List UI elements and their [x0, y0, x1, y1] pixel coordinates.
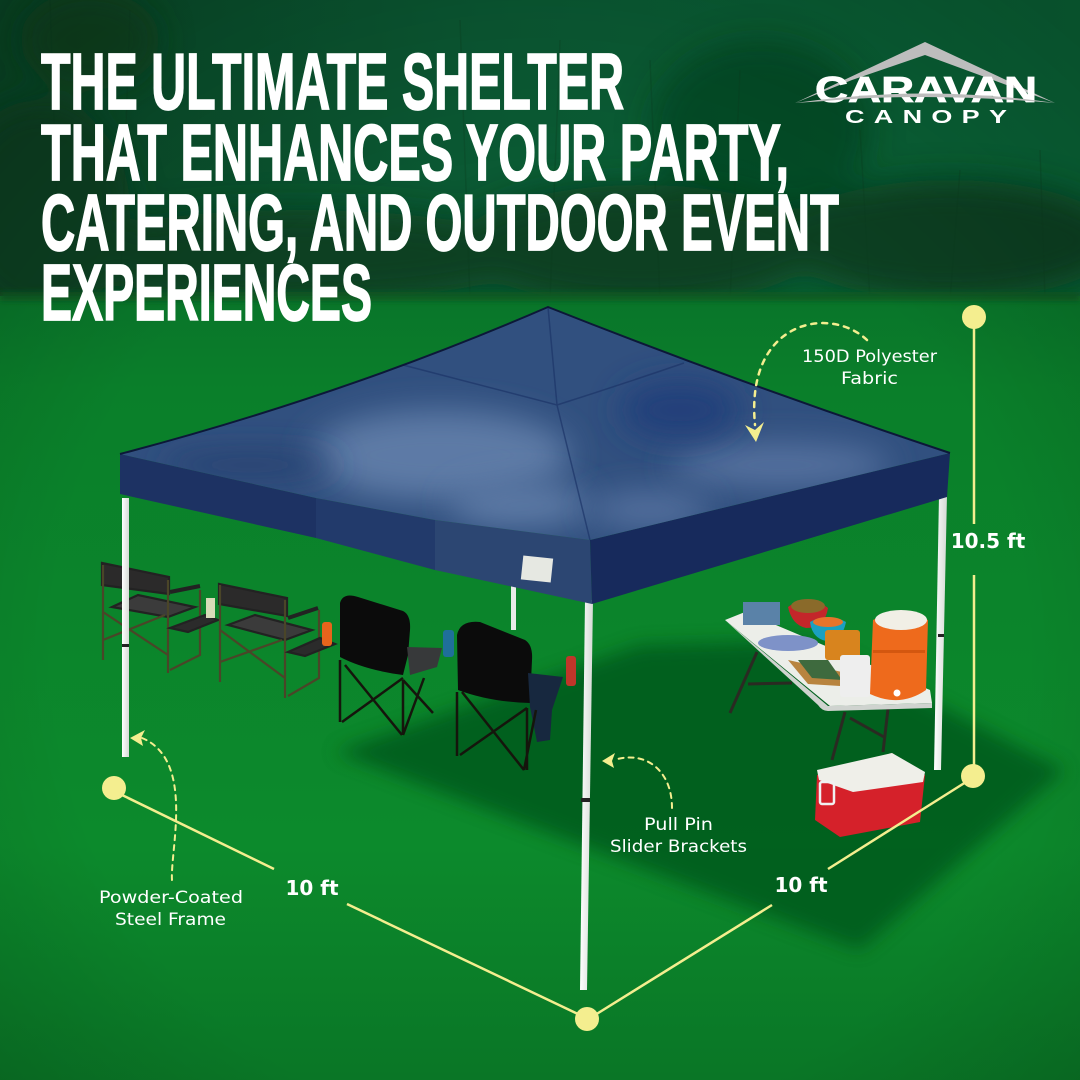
- callout: Powder-Coated Steel Frame: [99, 730, 243, 929]
- orange water cooler: [870, 610, 928, 700]
- canopy shadow on grass: [335, 640, 1065, 950]
- background: forest and sky: [0, 0, 1080, 320]
- dimension: right width 10 ft: [575, 782, 966, 1031]
- callout: Powder-Coated Steel Frame: Steel Frame: [115, 910, 226, 929]
- chair: folding director chair 2: [219, 584, 335, 698]
- dimension: left width 10 ft: [102, 776, 580, 1015]
- callout: 150D Polyester Fabric: 150D Polyester: [802, 347, 937, 366]
- right rear pole: [934, 495, 947, 770]
- logo: Caravan Canopy: CARAVAN: [815, 69, 1037, 110]
- canopy top: [120, 307, 950, 540]
- red ice chest cooler: [815, 753, 925, 837]
- callout: 150D Polyester Fabric: Fabric: [841, 369, 898, 388]
- table with food: [725, 599, 932, 760]
- callout: Pull Pin Slider Brackets: Pull Pin: [644, 815, 713, 834]
- label patch: [521, 555, 553, 583]
- back pole: [511, 585, 516, 630]
- dimension: height 10.5 ft: 10.5 ft: [951, 529, 1026, 553]
- title: [41, 37, 839, 337]
- canopy valance: [120, 453, 950, 604]
- dimension: left width 10 ft: 10 ft: [285, 876, 339, 900]
- dimension: right width 10 ft: 10 ft: [774, 873, 828, 897]
- logo: Caravan Canopy: CANOPY: [845, 107, 1007, 127]
- chair: black camp chair 4: [457, 622, 576, 770]
- callout: Powder-Coated Steel Frame: Powder-Coated: [99, 888, 243, 907]
- callout: Pull Pin Slider Brackets: [602, 753, 747, 856]
- left front pole: [122, 498, 129, 757]
- dimension: height 10.5 ft: [951, 305, 1026, 788]
- chair: black camp chair 3: [340, 595, 454, 735]
- callout: 150D Polyester Fabric: [745, 323, 937, 442]
- title: THE ULTIMATE SHELTER: [41, 37, 624, 126]
- logo: Caravan Canopy: [795, 42, 1055, 127]
- front center pole: [580, 600, 593, 990]
- callout: Pull Pin Slider Brackets: Slider Brackets: [610, 837, 747, 856]
- chair: folding director chair 1: [102, 563, 218, 673]
- title: EXPERIENCES: [41, 248, 372, 337]
